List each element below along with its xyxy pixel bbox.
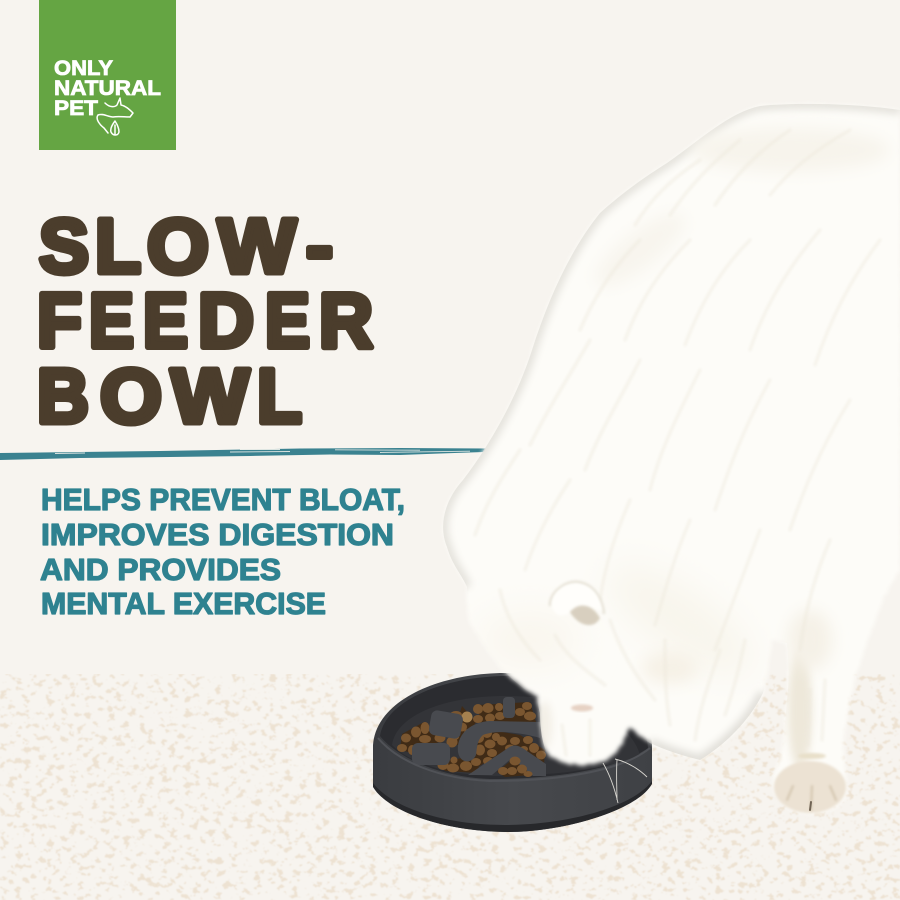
kibble bbox=[397, 702, 546, 772]
title line: BOWL: B bbox=[37, 354, 89, 440]
bowl base ledge bbox=[373, 781, 652, 832]
paw bbox=[774, 753, 846, 813]
dog bbox=[443, 104, 900, 814]
speckled ground texture bbox=[0, 674, 900, 900]
fur shading bbox=[443, 104, 900, 770]
title line: FEEDER: D bbox=[198, 278, 254, 364]
logo: Only Natural Pet: ONLY bbox=[54, 57, 113, 80]
title line: SLOW-: - bbox=[306, 204, 333, 290]
bowl ridges bbox=[412, 697, 546, 776]
logo: Only Natural Pet: NATURAL bbox=[54, 77, 161, 100]
title line: SLOW-: W bbox=[218, 204, 296, 290]
logo: Only Natural Pet: PET bbox=[54, 97, 98, 120]
bowl interior bbox=[380, 676, 648, 779]
title line: FEEDER: E bbox=[143, 278, 188, 364]
subheading: MENTAL EXERCISE bbox=[41, 586, 326, 621]
subheading bbox=[40, 482, 405, 621]
subheading: HELPS PREVENT BLOAT, bbox=[41, 482, 405, 517]
subheading: IMPROVES DIGESTION bbox=[41, 517, 394, 552]
title bbox=[37, 204, 373, 440]
soft fur tone patches bbox=[702, 132, 880, 168]
title line: BOWL bbox=[37, 354, 302, 440]
title line: FEEDER bbox=[37, 278, 373, 364]
title line: BOWL: O bbox=[100, 354, 162, 440]
icon: dog and leaf outline bbox=[97, 98, 133, 135]
dog body silhouette bbox=[443, 104, 900, 814]
nose crease bbox=[571, 704, 593, 712]
kibble inside chevron bbox=[498, 756, 532, 777]
title line: BOWL: W bbox=[171, 354, 249, 440]
fur strands bbox=[475, 130, 880, 755]
bowl outer wall bbox=[373, 673, 652, 832]
kibble base bbox=[400, 702, 545, 777]
title line: SLOW-: S bbox=[39, 204, 89, 290]
logo: Only Natural Pet bbox=[39, 0, 176, 150]
brush stroke divider bbox=[0, 448, 486, 460]
title line: FEEDER: F bbox=[37, 278, 82, 364]
whiskers bbox=[603, 759, 647, 803]
title line: SLOW- bbox=[39, 204, 333, 290]
subheading: AND PROVIDES bbox=[40, 552, 281, 587]
ear bbox=[550, 582, 604, 625]
bowl front rim highlight bbox=[378, 738, 650, 781]
title line: FEEDER: E bbox=[89, 278, 134, 364]
title line: BOWL: L bbox=[257, 354, 302, 440]
title line: FEEDER: R bbox=[319, 278, 373, 364]
title line: SLOW-: O bbox=[147, 204, 209, 290]
title line: FEEDER: E bbox=[265, 278, 310, 364]
slow-feeder bowl bbox=[373, 673, 652, 832]
title line: SLOW-: L bbox=[95, 204, 141, 290]
